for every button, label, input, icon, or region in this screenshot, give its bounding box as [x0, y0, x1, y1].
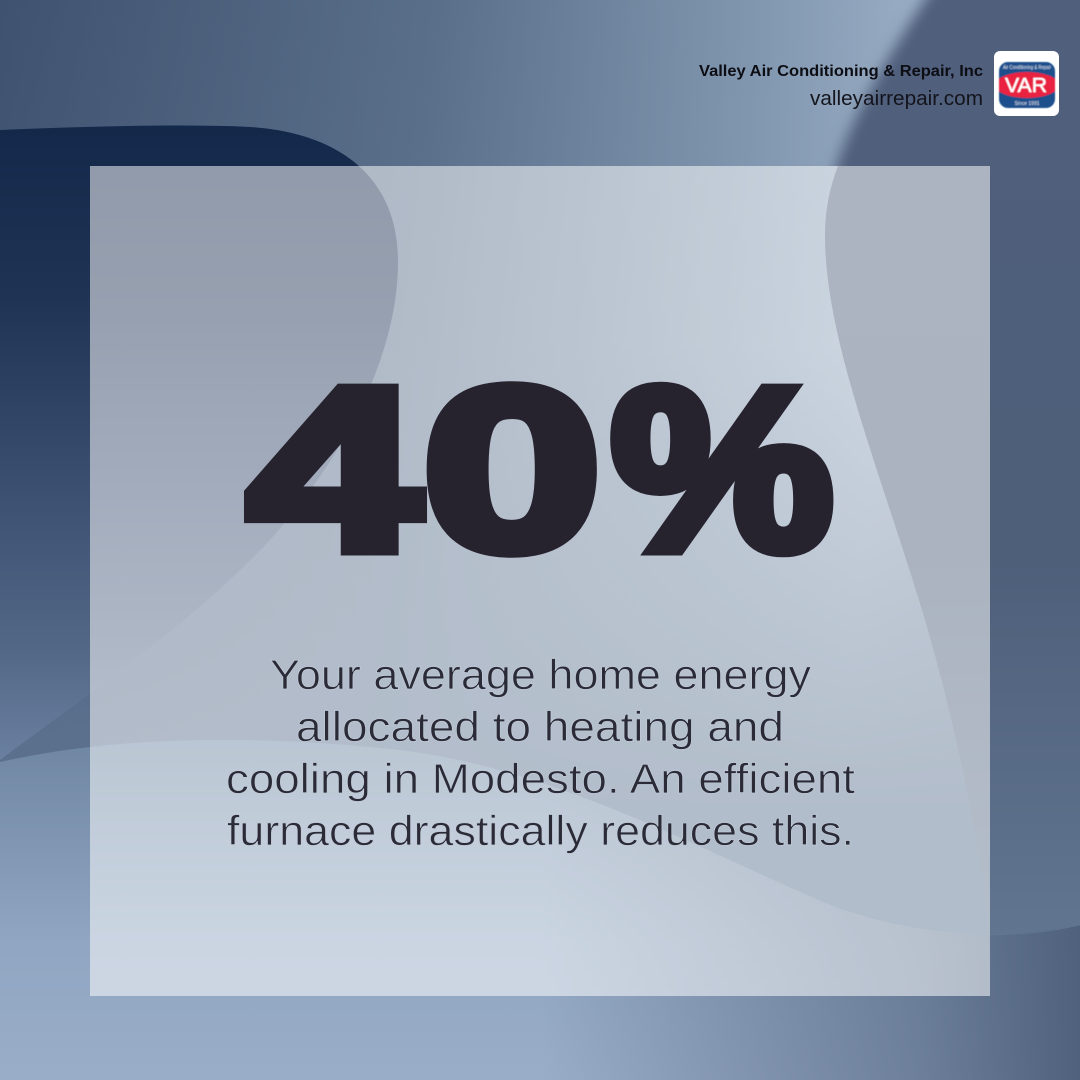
big statistic: 40%: 4: [248, 340, 420, 598]
body text: Your average home energy: [270, 651, 811, 698]
background shape: bottom wave shade: [0, 740, 1080, 1080]
body text: cooling in Modesto. An efficient: [226, 755, 855, 802]
company name: Valley Air Conditioning & Repair, Inc: [699, 63, 983, 80]
background shape: bottom wave: [0, 740, 1080, 1080]
big statistic: 40%: 0: [423, 340, 601, 598]
body text: allocated to heating and: [296, 703, 784, 750]
logo: VAR: [1005, 75, 1047, 97]
body text: [226, 651, 855, 854]
logo: Air Conditioning & Repair: [1003, 65, 1051, 71]
translucent panel: [90, 166, 990, 996]
logo: [994, 51, 1059, 116]
logo: Since 1991: [1014, 101, 1040, 107]
background shape: right dark curve, upper soft part: [828, 0, 1080, 166]
body text: furnace drastically reduces this.: [227, 807, 854, 854]
big statistic: 40%: %: [611, 340, 833, 598]
background shape: right dark curve: [825, 166, 1080, 805]
big statistic: 40%: [248, 340, 833, 598]
background shape: dark left blob: [0, 126, 398, 760]
website: valleyairrepair.com: [810, 88, 983, 110]
